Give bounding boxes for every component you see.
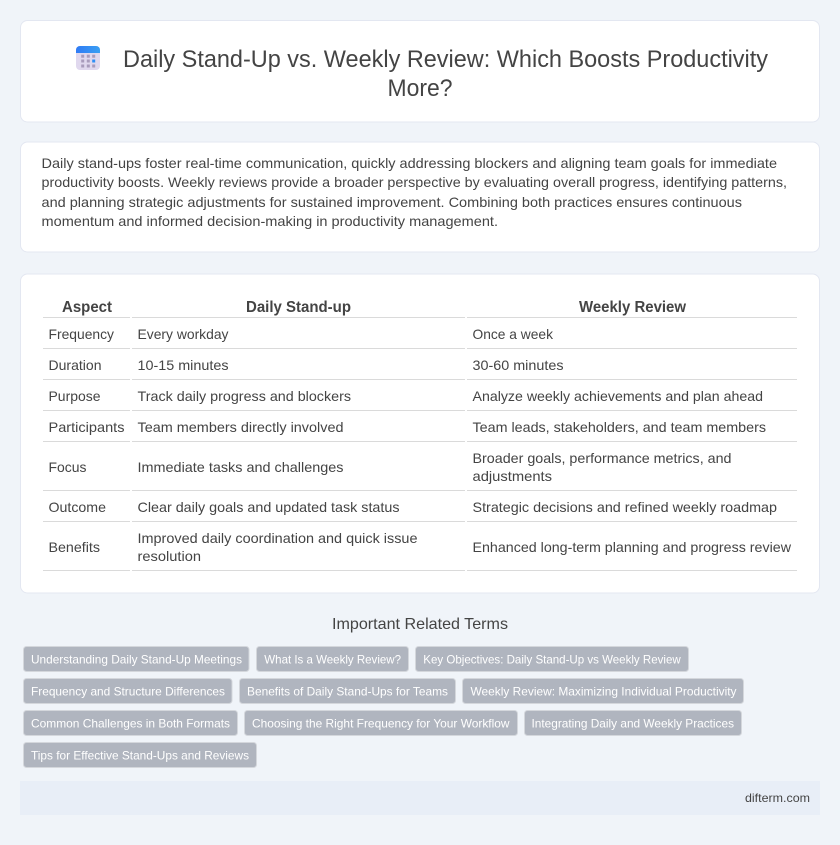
row: participants: Team members directly involved (138, 419, 344, 435)
tag (24, 742, 256, 768)
tag (24, 678, 232, 704)
row: purpose: Purpose (48, 388, 101, 404)
text block: summary paragraph: momentum and informed decision-making in productivity management. (42, 213, 498, 229)
text block: summary paragraph (42, 155, 787, 229)
row: duration: 10-15 minutes (138, 357, 228, 373)
panel: related term tags (24, 646, 744, 768)
tag (240, 678, 456, 704)
row: outcome: Outcome (48, 499, 106, 515)
panel: title header (20, 20, 820, 122)
tag (244, 710, 518, 736)
tag: Benefits of Daily Stand-Ups for Teams (247, 684, 448, 698)
tag: What Is a Weekly Review? (264, 652, 401, 666)
text block: summary paragraph: and planning strategic adjustments for sustained improvement. Combining both practices ensures continuous (42, 194, 742, 210)
row: outcome: Clear daily goals and updated task status (138, 499, 400, 515)
row: duration: 30-60 minutes (472, 357, 564, 373)
tag: Choosing the Right Frequency for Your Workflow (252, 716, 510, 730)
tag: Key Objectives: Daily Stand-Up vs Weekly Review (423, 652, 681, 666)
row: benefits (48, 530, 792, 564)
row: purpose: Analyze weekly achievements and plan ahead (472, 388, 763, 404)
row: participants: Participants (48, 419, 124, 435)
row: benefits: Improved daily coordination and quick issue (138, 530, 418, 546)
title: More? (388, 75, 452, 102)
row: purpose: Track daily progress and blockers (138, 388, 351, 404)
heading: important related terms: Important Related Terms (332, 616, 508, 633)
title: Daily Stand-Up vs. Weekly Review: Which Boosts Productivity (123, 46, 768, 73)
tag: Frequency and Structure Differences (31, 684, 225, 698)
tag: Weekly Review: Maximizing Individual Productivity (470, 684, 736, 698)
title (123, 46, 768, 102)
row: focus: adjustments (472, 468, 552, 484)
tag (462, 678, 744, 704)
table header row: Daily Stand-up (246, 299, 351, 316)
row: participants (48, 419, 766, 435)
row: benefits: Enhanced long-term planning and progress review (472, 539, 792, 555)
tag (524, 710, 742, 736)
tag (416, 646, 688, 672)
panel: intro summary (20, 142, 820, 252)
row: benefits: resolution (138, 548, 201, 564)
text block: summary paragraph: Daily stand-ups foster real-time communication, quickly addressing blockers and aligning team goals for immediate (42, 155, 777, 171)
text block: summary paragraph: productivity boosts. Weekly reviews provide a broader perspective by evaluating overall progress, identifying patterns, (42, 174, 787, 190)
row: focus: Broader goals, performance metrics, and (472, 450, 732, 466)
table header row: Weekly Review (579, 299, 687, 316)
row: frequency (48, 326, 554, 342)
row: duration (48, 357, 564, 373)
footer bar (20, 781, 820, 815)
row: focus: Focus (48, 459, 86, 475)
row: purpose (48, 388, 763, 404)
row: benefits: Benefits (48, 539, 100, 555)
row: focus: Immediate tasks and challenges (138, 459, 344, 475)
row: frequency: Once a week (472, 326, 554, 342)
tag: Integrating Daily and Weekly Practices (532, 716, 734, 730)
row: outcome: Strategic decisions and refined weekly roadmap (472, 499, 777, 515)
table header row: Aspect (62, 299, 113, 316)
tag: Understanding Daily Stand-Up Meetings (31, 652, 242, 666)
tag (24, 710, 238, 736)
tag: Common Challenges in Both Formats (31, 716, 230, 730)
icon: calendar (76, 46, 100, 70)
tag: Tips for Effective Stand-Ups and Reviews (31, 748, 249, 762)
row: outcome (48, 499, 777, 515)
row: frequency: Frequency (48, 326, 114, 342)
row: duration: Duration (48, 357, 102, 373)
panel: comparison table (20, 274, 820, 593)
tag (256, 646, 408, 672)
table header row (62, 299, 687, 316)
tag (24, 646, 249, 672)
row: frequency: Every workday (138, 326, 228, 342)
row: participants: Team leads, stakeholders, and team members (472, 419, 766, 435)
footer bar: difterm.com (745, 791, 810, 805)
row: focus (48, 450, 732, 484)
